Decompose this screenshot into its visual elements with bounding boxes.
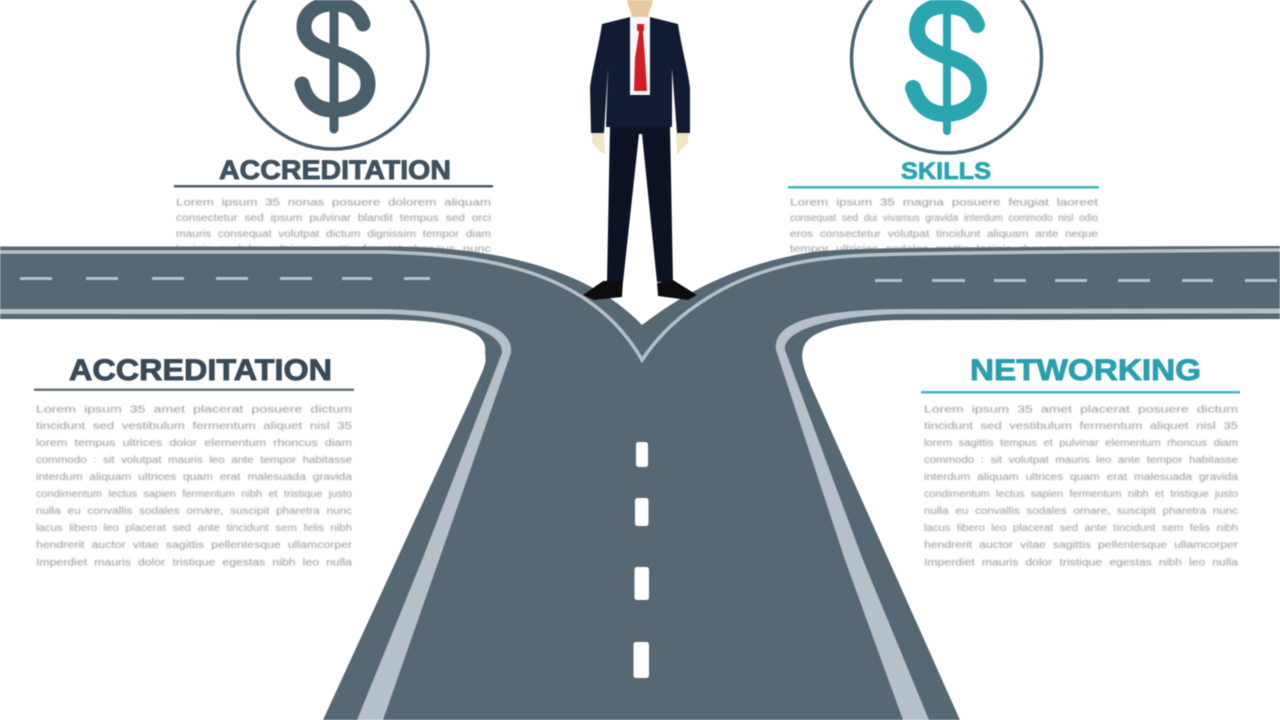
text block: accreditation lower: interdum aliquam ultrices quam erat malesuada gravida: [36, 472, 353, 483]
text block: networking: Imperdiet mauris dolor tristique egestas nibh leo nulla: [924, 558, 1239, 568]
text block: accreditation top: consectetur sed ipsum pulvinar blandit tempus sed orci: [176, 213, 491, 224]
shoes: [583, 280, 697, 300]
legs: [607, 125, 673, 282]
text block: accreditation lower: hendrerit auctor vitae sagittis pellentesque ullamcorper: [36, 540, 353, 551]
text block: skills: Lorem ipsum 35 magna posuere feugiat laoreet: [790, 198, 1098, 208]
text block: skills: tempor ultricies sodales mattis lacinia rhoncus nunc: [790, 244, 1098, 255]
lower left edge stripe: [0, 309, 511, 720]
text block: accreditation top: Lorem ipsum 35 nonas posuere dolorem aliquam: [176, 198, 491, 208]
jacket: [590, 17, 690, 133]
text block: networking: commodo : sit volutpat mauris leo ante tempor habitasse: [924, 455, 1238, 466]
text block: skills: [790, 198, 1099, 255]
road: [0, 246, 1280, 720]
heading: accreditation lower: ACCREDITATION: [69, 354, 332, 387]
text block: networking: nulla eu convallis sodales ornare, suscipit pharetra nunc: [924, 506, 1238, 517]
text block: accreditation lower: nulla eu convallis sodales ornare, suscipit pharetra nunc: [36, 506, 352, 517]
text block: accreditation lower: [36, 404, 353, 568]
businessman: [583, 0, 697, 300]
right lane dashes: [875, 279, 1277, 282]
lower right edge stripe: [776, 308, 1280, 720]
text block: networking: condimentum lectus sapien fermentum nibh et tristique justo: [924, 489, 1238, 500]
text block: accreditation lower: lorem tempus ultrices dolor elementum rhoncus diam: [36, 438, 352, 449]
heading: skills: SKILLS: [901, 158, 991, 185]
text block: accreditation lower: condimentum lectus sapien fermentum nibh et tristique justo: [36, 489, 352, 500]
text block: accreditation lower: Imperdiet mauris dolor tristique egestas nibh leo nulla: [36, 558, 353, 568]
hands: [592, 133, 689, 155]
text block: networking: tincidunt sed vestibulum fermentum aliquet nisl 35: [924, 421, 1239, 432]
text block: accreditation lower: tincidunt sed vestibulum fermentum aliquet nisl 35: [36, 421, 353, 432]
top edge stripes: [0, 250, 1280, 360]
text block: networking: Lorem ipsum 35 amet placerat posuere dictum: [924, 404, 1238, 416]
heading: networking: NETWORKING: [970, 354, 1201, 387]
text block: networking: [924, 404, 1239, 568]
text block: accreditation top: [176, 198, 491, 255]
rule: accreditation top: [174, 185, 493, 188]
text block: networking: lorem sagittis tempus et pulvinar elementum rhoncus diam: [924, 438, 1238, 449]
tie: [634, 24, 647, 91]
rule: accreditation lower: [34, 388, 354, 391]
centre lane dashes: [634, 442, 649, 678]
text block: accreditation top: lacinia sodales ultrices mattis feugiat rhoncus nunc: [176, 244, 491, 255]
text block: accreditation top: mauris consequat volutpat dictum dignissim tempor diam: [176, 229, 491, 240]
icon: dollar coin accreditation: [238, 0, 428, 149]
text block: skills: eros consectetur volutpat tincidunt aliquam ante neque: [790, 229, 1099, 240]
rule: networking: [921, 391, 1240, 394]
shirt: [630, 17, 650, 95]
text block: networking: hendrerit auctor vitae sagittis pellentesque ullamcorper: [924, 540, 1239, 551]
text block: skills: consequat sed dui vivamus gravida interdum commodo nisl odio: [790, 213, 1098, 224]
text block: networking: interdum aliquam ultrices quam erat malesuada gravida: [924, 472, 1239, 483]
left lane dashes: [20, 277, 430, 280]
rule: skills: [788, 186, 1099, 188]
text block: networking: lacus libero leo placerat sed ante tincidunt sem felis nibh: [924, 523, 1238, 534]
text block: accreditation lower: commodo : sit volutpat mauris leo ante tempor habitasse: [36, 455, 352, 466]
text block: accreditation lower: lacus libero leo placerat sed ante tincidunt sem felis nibh: [36, 523, 352, 534]
icon: dollar coin skills: [852, 0, 1042, 153]
text block: accreditation lower: Lorem ipsum 35 amet placerat posuere dictum: [36, 404, 352, 416]
heading: accreditation top: ACCREDITATION: [219, 155, 451, 185]
neck and head: [627, 0, 653, 18]
